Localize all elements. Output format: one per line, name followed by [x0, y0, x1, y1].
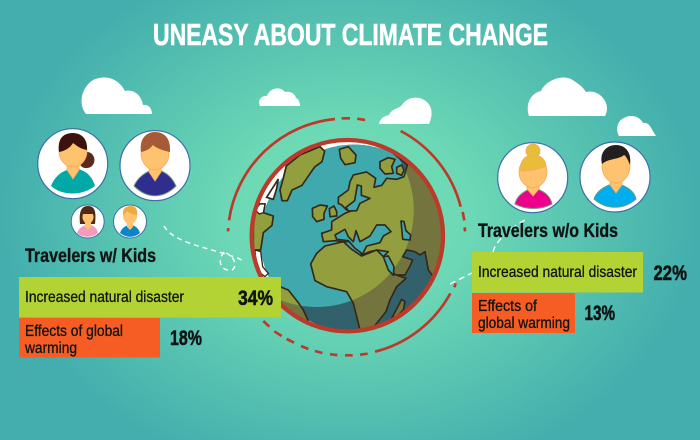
- cloud: top right large: [528, 78, 607, 116]
- bar: increased natural disaster, with kids: Increased natural disaster: [25, 289, 185, 306]
- orbit ring: [228, 118, 465, 355]
- person: man with black hair: [580, 142, 650, 212]
- person: woman with ponytail: [38, 129, 108, 199]
- dashed path: left: [164, 226, 244, 270]
- heading: travelers with kids: Travelers w/ Kids: [25, 246, 156, 267]
- bar: effects of global warming, without kids: [472, 293, 615, 333]
- title: UNEASY ABOUT CLIMATE CHANGE: [153, 17, 548, 52]
- cloud: top right small: [617, 116, 656, 136]
- bar: effects of global warming, with kids: [19, 318, 202, 358]
- bar: increased natural disaster, with kids: [19, 277, 281, 318]
- bar: increased natural disaster, without kids: [472, 252, 687, 292]
- bar: effects of global warming, with kids: Effects of global: [25, 323, 123, 340]
- cloud: top left: [82, 77, 152, 114]
- globe with orbit rings: [228, 118, 465, 355]
- bar: increased natural disaster, without kids: 22%: [654, 262, 687, 285]
- inland seas: [335, 185, 411, 275]
- bar: effects of global warming, with kids: warming: [24, 340, 77, 357]
- cloud: small centre: [259, 88, 300, 106]
- person: man with brown hair: [120, 131, 190, 201]
- cloud: near globe: [379, 98, 432, 124]
- person: girl: [71, 205, 104, 238]
- globe: [251, 140, 453, 332]
- heading: travelers without kids: Travelers w/o Kids: [478, 221, 618, 242]
- bar: increased natural disaster, without kids: Increased natural disaster: [478, 264, 638, 281]
- bar: effects of global warming, without kids: 13%: [584, 302, 615, 325]
- bar: effects of global warming, without kids: Effects of: [478, 298, 537, 315]
- bar: effects of global warming, with kids: 18%: [170, 327, 202, 350]
- dashed path: right: [450, 220, 525, 284]
- bar: increased natural disaster, with kids: 34%: [238, 287, 273, 310]
- person: boy: [114, 205, 146, 238]
- person: woman with blonde bun: [498, 143, 568, 213]
- bar: effects of global warming, without kids: global warming: [478, 315, 570, 332]
